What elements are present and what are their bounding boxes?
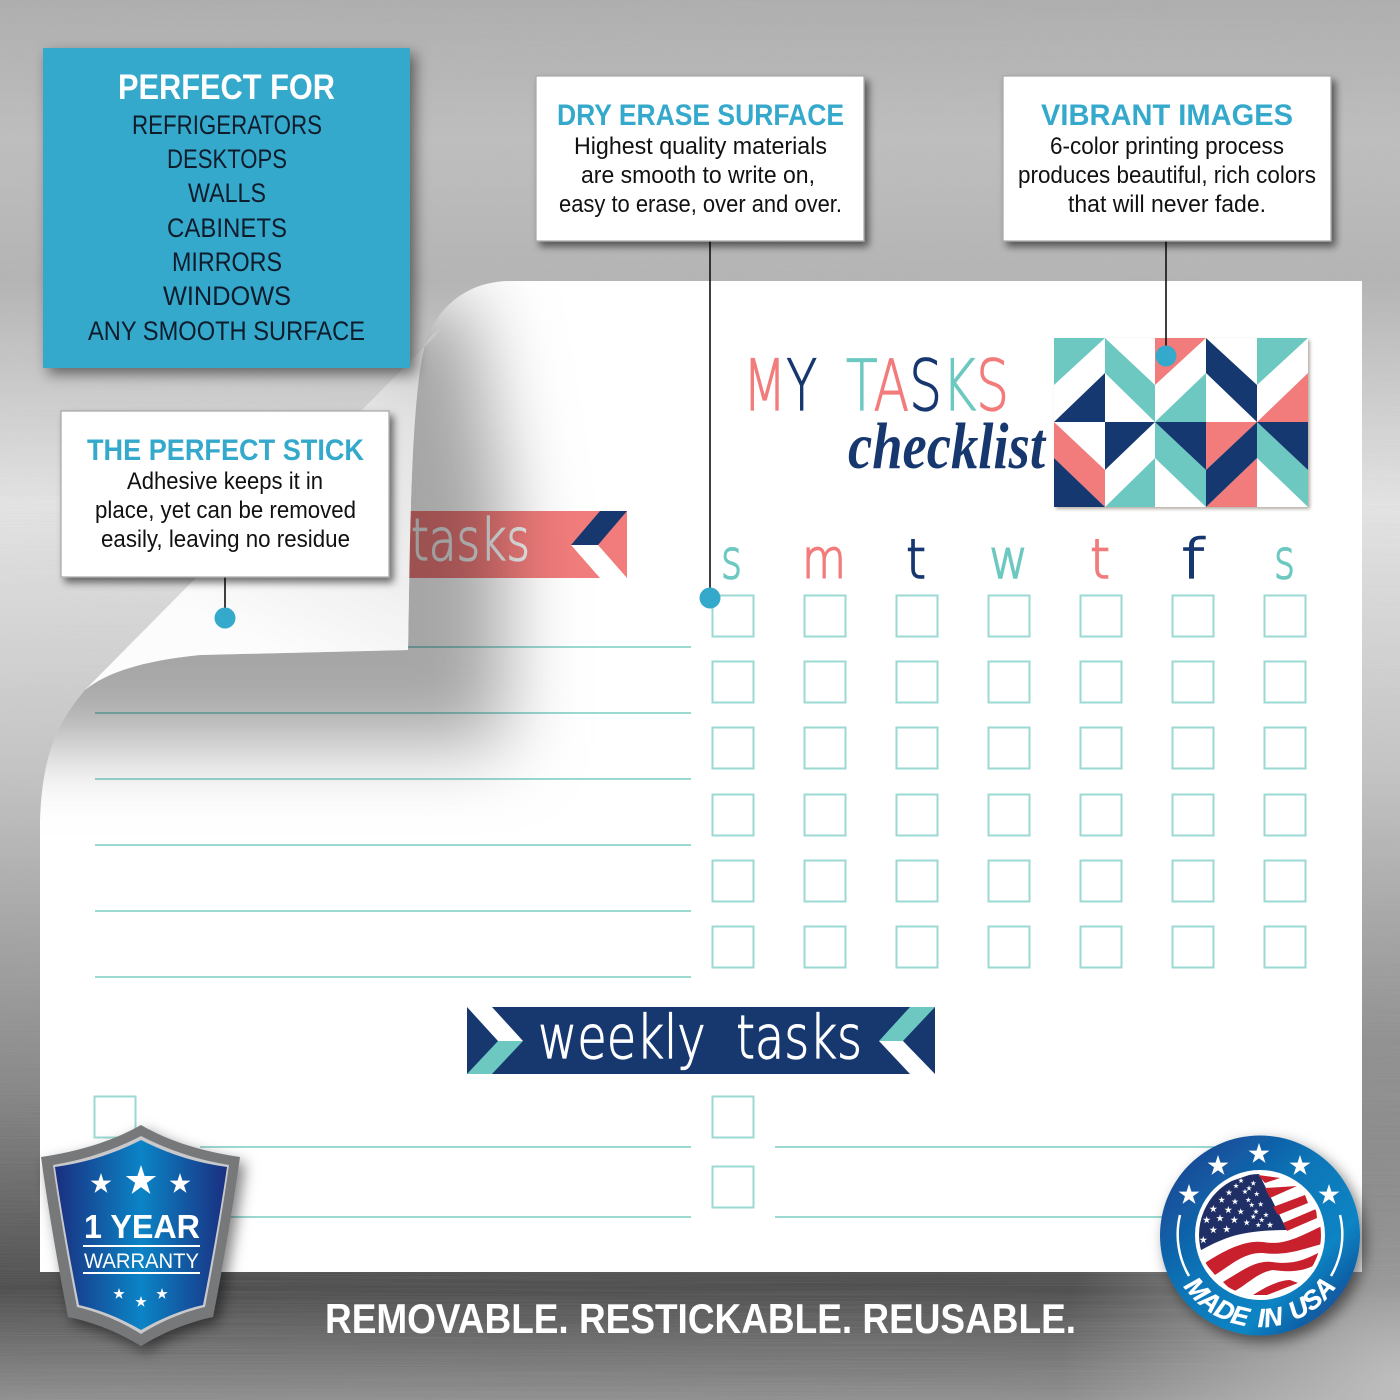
daily tasks banner: tasks xyxy=(411,506,530,574)
callout: the perfect stick xyxy=(61,411,389,628)
callout: dry erase surface xyxy=(536,76,864,608)
panel: perfect for: PERFECT FOR xyxy=(118,68,335,107)
callout: vibrant images: VIBRANT IMAGES xyxy=(1041,99,1293,132)
weekday headings: t xyxy=(1090,528,1110,591)
callout: dry erase surface: DRY ERASE SURFACE xyxy=(557,99,844,132)
callout: dry erase surface: are smooth to write on, xyxy=(581,162,815,189)
stars xyxy=(91,1165,190,1307)
callout: vibrant images: 6-color printing process xyxy=(1050,133,1284,160)
badge: 1 year warranty: 1 YEAR xyxy=(84,1208,200,1245)
callout: the perfect stick: THE PERFECT STICK xyxy=(87,434,364,467)
tagline: REMOVABLE. RESTICKABLE. REUSABLE. xyxy=(325,1295,1076,1342)
weekday headings: w xyxy=(989,528,1028,591)
panel: perfect for: CABINETS xyxy=(167,213,287,243)
weekly tasks banner: weekly tasks xyxy=(538,1003,862,1073)
curl shadow on sheet xyxy=(0,300,505,745)
curled flap xyxy=(85,325,446,690)
title: checklist: checklist xyxy=(848,410,1046,483)
panel: perfect for: WINDOWS xyxy=(163,281,291,311)
callout: dry erase surface: easy to erase, over and over. xyxy=(559,191,842,218)
callout: vibrant images: produces beautiful, rich colors xyxy=(1018,162,1316,189)
weekday headings: f xyxy=(1181,528,1205,591)
badge: 1 year warranty xyxy=(41,1125,240,1346)
panel: perfect for: WALLS xyxy=(188,178,266,208)
weekday headings xyxy=(721,528,1295,591)
panel: perfect for: REFRIGERATORS xyxy=(132,110,322,140)
title: my tasks: MY xyxy=(743,345,817,427)
geometric pattern image xyxy=(1054,338,1308,507)
badge: made in usa xyxy=(1155,1132,1373,1350)
callout: the perfect stick: Adhesive keeps it in xyxy=(127,468,323,495)
title: my tasks: TASKS xyxy=(846,345,1009,427)
callout: the perfect stick: easily, leaving no residue xyxy=(101,526,350,553)
badge: made in usa: MADE IN USA xyxy=(1183,1278,1336,1328)
waving flag xyxy=(1199,1174,1321,1295)
weekday headings: m xyxy=(802,528,846,591)
panel: perfect for xyxy=(43,48,410,368)
title: my tasks xyxy=(743,345,1009,427)
weekday headings: s xyxy=(721,528,742,591)
weekly checkbox grid xyxy=(712,596,1306,968)
callout: vibrant images xyxy=(1003,76,1331,366)
panel: perfect for: MIRRORS xyxy=(172,247,282,277)
weekday headings: s xyxy=(1274,528,1295,591)
callout: dry erase surface: Highest quality materials xyxy=(574,133,827,160)
badge: 1 year warranty: WARRANTY xyxy=(84,1250,199,1273)
weekday headings: t xyxy=(906,528,926,591)
daily tasks banner xyxy=(400,506,627,578)
weekly task checkboxes xyxy=(94,1096,754,1208)
white ring stars xyxy=(1179,1143,1339,1204)
callout: vibrant images: that will never fade. xyxy=(1068,191,1266,218)
panel: perfect for: DESKTOPS xyxy=(167,144,287,174)
callout: the perfect stick: place, yet can be removed xyxy=(95,497,356,524)
panel: peeled dry erase sheet xyxy=(0,281,1362,1272)
panel: perfect for: ANY SMOOTH SURFACE xyxy=(88,316,365,346)
